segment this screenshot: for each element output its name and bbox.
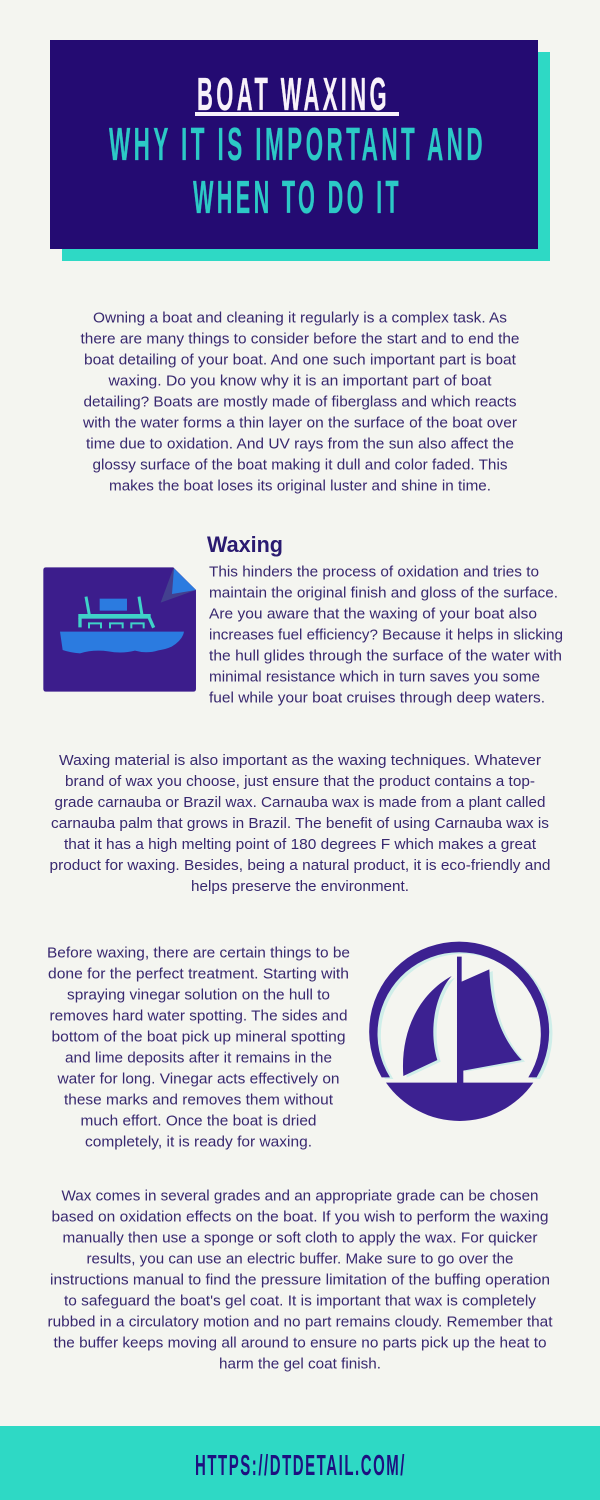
left sail bbox=[403, 976, 452, 1076]
before waxing paragraph: removes hard water spotting. The sides and bbox=[50, 1007, 348, 1024]
before waxing paragraph: spraying vinegar solution on the hull to bbox=[67, 986, 330, 1004]
title banner bbox=[50, 40, 550, 261]
subtitle bbox=[109, 118, 486, 223]
intro paragraph: detailing? Boats are mostly made of fiberglass and which reacts bbox=[84, 394, 516, 411]
material paragraph: product for waxing. Besides, being a natural product, it is eco-friendly and bbox=[50, 857, 550, 874]
grades paragraph: Wax comes in several grades and an appropriate grade can be chosen bbox=[62, 1188, 538, 1204]
grades paragraph: instructions manual to find the pressure limitation of the buffing operation bbox=[50, 1272, 550, 1288]
intro paragraph: with the water forms a thin layer on the surface of the boat over bbox=[82, 415, 517, 432]
hull bbox=[386, 1083, 533, 1121]
right sail and mast bbox=[457, 957, 522, 1083]
material paragraph: brand of wax you choose, just ensure that the product contains a top- bbox=[65, 773, 535, 790]
intro paragraph: time due to oxidation. And UV rays from the sun also affect the bbox=[86, 436, 514, 453]
intro paragraph: Owning a boat and cleaning it regularly is a complex task. As bbox=[93, 310, 507, 327]
before waxing paragraph: Before waxing, there are certain things to be bbox=[47, 944, 350, 962]
waxing paragraph: This hinders the process of oxidation and tries to bbox=[209, 564, 539, 580]
grades paragraph: to safeguard the boat's gel coat. It is important that wax is completely bbox=[64, 1292, 537, 1310]
intro paragraph: glossy surface of the boat making it dull and color faded. This bbox=[92, 457, 508, 474]
before waxing paragraph: bottom of the boat pick up mineral spotting bbox=[52, 1028, 346, 1045]
grades paragraph: the buffer keeps moving all around to ensure no parts pick up the heat to bbox=[54, 1334, 546, 1352]
footer bbox=[0, 1426, 600, 1500]
grades paragraph: rubbed in a circulatory motion and no part remains cloudy. Remember that bbox=[48, 1314, 553, 1330]
intro paragraph: there are many things to consider before the start and to end the bbox=[80, 331, 520, 348]
material paragraph: carnauba palm that grows in Brazil. The benefit of using Carnauba wax is bbox=[51, 815, 549, 832]
waxing paragraph: fuel while your boat cruises through deep waters. bbox=[209, 690, 545, 706]
icon shadow bbox=[372, 943, 552, 1079]
material paragraph: Waxing material is also important as the waxing techniques. Whatever bbox=[59, 752, 541, 769]
before waxing paragraph: and lime deposits after it remains in the bbox=[65, 1049, 332, 1066]
intro paragraph: boat detailing of your boat. And one such important part is boat bbox=[84, 352, 517, 369]
footer url: HTTPS://DTDETAIL.COM/ bbox=[195, 1450, 406, 1482]
grades paragraph: based on oxidation effects on the boat. If you wish to perform the waxing bbox=[52, 1208, 548, 1226]
material paragraph: grade carnauba or Brazil wax. Carnauba wax is made from a plant called bbox=[54, 794, 546, 811]
intro paragraph: waxing. Do you know why it is an important part of boat bbox=[107, 373, 492, 390]
title: boat waxing bbox=[195, 68, 399, 120]
grades paragraph: manually then use a sponge or soft cloth to apply the wax. For quicker bbox=[62, 1230, 538, 1246]
grades paragraph: harm the gel coat finish. bbox=[219, 1356, 381, 1372]
grades paragraph: results, you can use an electric buffer. Make sure to go over the bbox=[86, 1250, 514, 1268]
grades paragraph bbox=[48, 1188, 553, 1372]
title: boat waxing: BOAT WAXING bbox=[197, 68, 390, 120]
before waxing paragraph: completely, it is ready for waxing. bbox=[85, 1133, 312, 1150]
material paragraph: that it has a high melting point of 180 degrees F which makes a great bbox=[64, 836, 537, 853]
before waxing paragraph: done for the perfect treatment. Starting with bbox=[48, 966, 349, 982]
material paragraph bbox=[50, 752, 550, 895]
ring bbox=[369, 942, 549, 1077]
waxing paragraph: maintain the original finish and gloss of the surface. bbox=[209, 584, 558, 602]
icon: boat card bbox=[43, 567, 196, 692]
before waxing paragraph: water for long. Vinegar acts effectively on bbox=[56, 1070, 340, 1087]
waxing paragraph: increases fuel efficiency? Because it helps in slicking bbox=[209, 626, 563, 644]
intro paragraph bbox=[80, 310, 520, 495]
heading: waxing: Waxing bbox=[207, 532, 283, 557]
material paragraph: helps preserve the environment. bbox=[191, 878, 409, 895]
waxing paragraph: the hull glides through the surface of the water with bbox=[209, 648, 562, 664]
waxing paragraph: Are you aware that the waxing of your boat also bbox=[209, 606, 537, 622]
icon: sailboat bbox=[369, 942, 552, 1121]
waxing paragraph bbox=[209, 564, 563, 706]
intro paragraph: makes the boat loses its original luster and shine in time. bbox=[109, 478, 491, 495]
before waxing paragraph: these marks and removes them without bbox=[64, 1091, 334, 1108]
before waxing paragraph: much effort. Once the boat is dried bbox=[80, 1112, 316, 1129]
before waxing paragraph bbox=[47, 944, 350, 1150]
waxing paragraph: minimal resistance which in turn saves you some bbox=[209, 668, 540, 686]
